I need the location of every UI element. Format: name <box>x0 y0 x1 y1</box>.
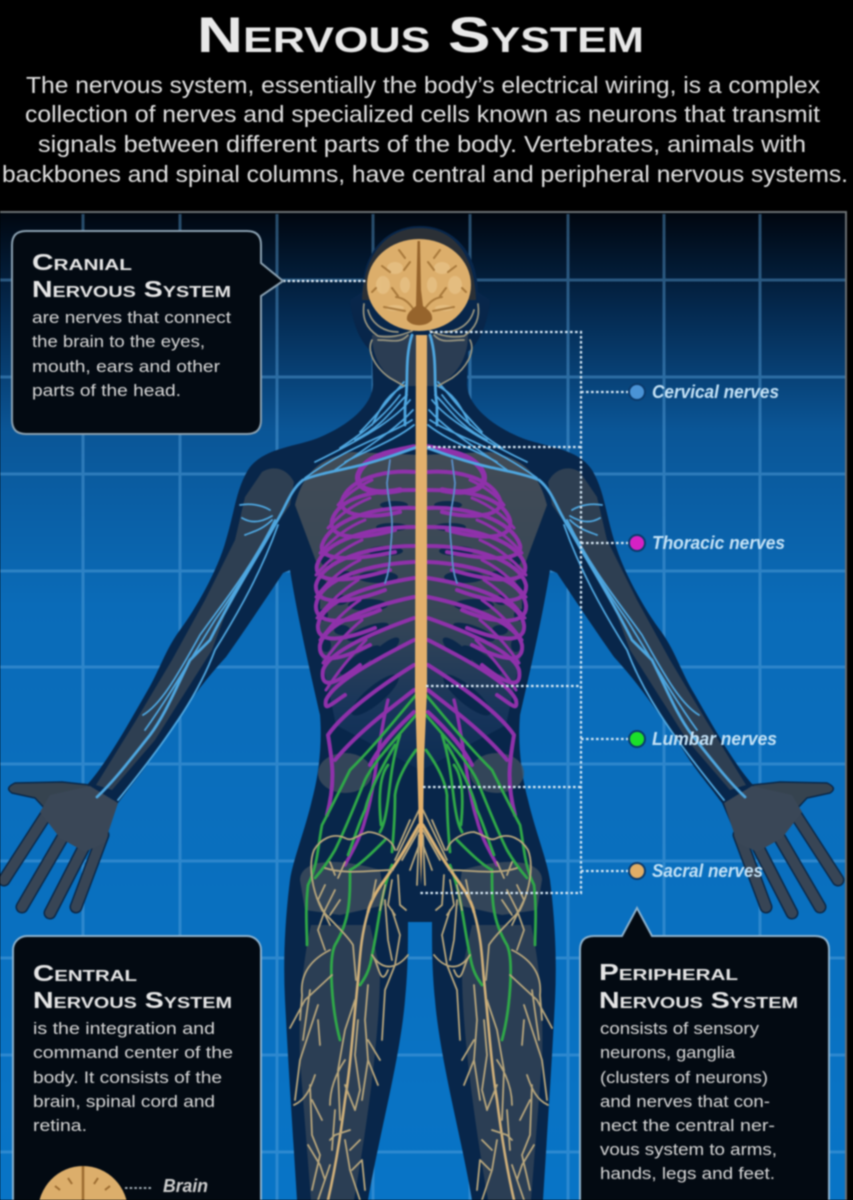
intro text: collection of nerves and specialized cells known as neurons that transmit <box>25 101 821 127</box>
legend: lumbar nerves: Lumbar nerves <box>652 729 777 749</box>
callout: cranial nervous system: parts of the head. <box>32 381 181 400</box>
legend: thoracic nerves: Thoracic nerves <box>652 533 785 553</box>
callout: central nervous system: Brain <box>163 1176 208 1196</box>
callout: central nervous system: retina. <box>33 1116 87 1135</box>
callout: central nervous system: body. It consists of the <box>33 1068 222 1087</box>
body silhouette <box>42 226 798 1200</box>
intro text: backbones and spinal columns, have central and peripheral nervous systems. <box>2 161 848 187</box>
callout: peripheral nervous system: Peripheral <box>599 959 738 985</box>
callout: peripheral nervous system: vous system to arms, <box>600 1140 777 1159</box>
human body figure <box>4 226 838 1200</box>
callout: central nervous system: Nervous System <box>33 987 232 1013</box>
callout: peripheral nervous system: and nerves that con- <box>600 1092 770 1111</box>
title: Nervous System <box>197 7 644 63</box>
callout: peripheral nervous system: (clusters of neurons) <box>600 1068 768 1087</box>
callout: central nervous system: command center of the <box>33 1043 233 1062</box>
legend: sacral nerves: Sacral nerves <box>652 861 763 881</box>
callout: cranial nervous system: mouth, ears and other <box>32 357 220 376</box>
intro text: The nervous system, essentially the body’s electrical wiring, is a complex <box>26 72 821 98</box>
cranial dotted leader <box>283 280 366 282</box>
right half: muscles, ribs and nerves <box>422 304 838 1200</box>
face and neck shading <box>372 335 468 386</box>
callout: cranial nervous system: Cranial <box>32 249 132 275</box>
callout: peripheral nervous system: consists of sensory <box>600 1019 760 1038</box>
brain <box>367 239 471 331</box>
callout: cranial nervous system: the brain to the eyes, <box>32 332 205 351</box>
callout: central nervous system <box>13 936 261 1200</box>
callout: peripheral nervous system: nect the central ner- <box>600 1116 775 1135</box>
callout: cranial nervous system: Nervous System <box>32 276 231 302</box>
callout: cranial nervous system <box>12 231 283 434</box>
brain leader <box>125 1187 152 1189</box>
callout: central nervous system: brain, spinal cord and <box>33 1092 215 1111</box>
callout: peripheral nervous system: Nervous System <box>599 987 798 1013</box>
legend: cervical nerves: Cervical nerves <box>652 382 779 402</box>
hair <box>362 228 476 300</box>
intro text: signals between different parts of the body. Vertebrates, animals with <box>38 131 806 157</box>
callout: central nervous system: Central <box>33 960 137 986</box>
callout: peripheral nervous system: neurons, ganglia <box>600 1043 736 1062</box>
left half: muscles, ribs and nerves <box>4 304 420 1200</box>
spinal cord <box>415 335 427 885</box>
callout: cranial nervous system: are nerves that connect <box>32 308 231 327</box>
intro text <box>2 72 848 187</box>
callout: central nervous system: is the integration and <box>33 1019 215 1038</box>
icon: small brain <box>38 1166 128 1200</box>
nerve bracket leaders <box>420 332 628 893</box>
callout: peripheral nervous system <box>580 908 829 1200</box>
callout: peripheral nervous system: hands, legs and feet. <box>600 1164 775 1183</box>
